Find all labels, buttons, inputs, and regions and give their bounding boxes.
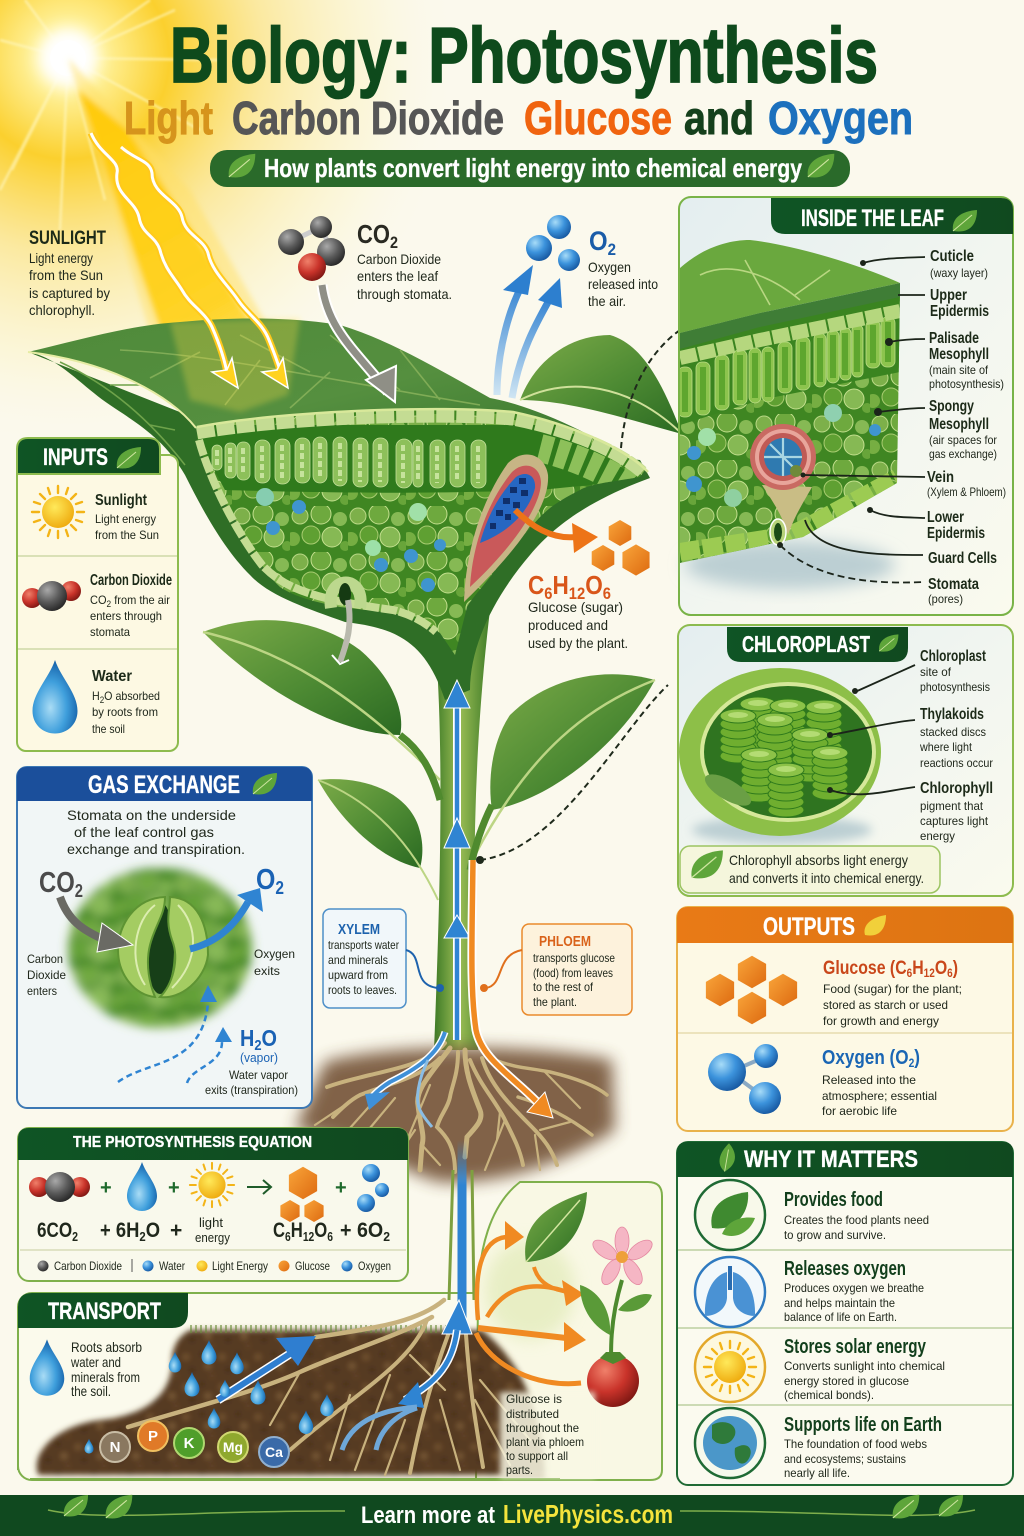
leaf labels: (air spaces for: [929, 433, 997, 447]
chloroplast callout: [680, 846, 940, 893]
outputs header: OUTPUTS: [763, 913, 855, 941]
co2 label: Carbon Dioxide: [357, 251, 441, 267]
subtitle: Oxygen: [768, 92, 913, 144]
chloroplast labels: energy: [920, 829, 955, 843]
output: oxygen: [708, 1044, 937, 1118]
gas exchange co2: [27, 867, 133, 998]
input: carbon dioxide: [22, 572, 172, 639]
equation icons: +: [100, 1177, 112, 1199]
glucose distribution text: [506, 1392, 584, 1477]
equation formula: 2: [383, 1229, 390, 1244]
gas exchange description: exchange and transpiration.: [67, 841, 245, 857]
xylem label: upward from: [328, 968, 388, 982]
sunlight label: chlorophyll.: [29, 302, 95, 318]
sunlight label: is captured by: [29, 285, 110, 301]
chloroplast labels: where light: [919, 740, 973, 754]
banner: How plants convert light energy into chemical energy: [264, 153, 802, 183]
output: glucose: Food (sugar) for the plant;: [823, 982, 962, 996]
leaf labels: Vein: [927, 469, 954, 486]
glucose callout: 12: [569, 584, 585, 603]
transport text: minerals from: [71, 1369, 140, 1385]
inside header: [771, 198, 1013, 234]
o2 label: Oxygen: [588, 259, 631, 275]
gas exchange description: [67, 807, 245, 857]
panel: chloroplast: [678, 625, 1013, 896]
transport header: [18, 1293, 188, 1328]
co2 label: enters the leaf: [357, 268, 438, 284]
input: carbon dioxide: enters through: [90, 609, 162, 623]
leaf vein section: [464, 454, 548, 602]
leaf veins: [120, 335, 480, 408]
stoma illustration: [68, 868, 252, 1028]
co2 label: [357, 219, 452, 302]
gas exchange header: GAS EXCHANGE: [88, 771, 240, 799]
glucose distribution text: Glucose is: [506, 1392, 562, 1406]
gas exchange header: [17, 767, 312, 801]
gas exchange water vapor: H: [240, 1025, 257, 1051]
lower roots: [128, 1300, 530, 1475]
footer sprig right: [680, 1495, 975, 1518]
output: glucose: stored as starch or used: [823, 998, 948, 1012]
output: oxygen: Oxygen (O: [822, 1047, 923, 1069]
equation icons: [29, 1162, 389, 1222]
xylem label: and minerals: [328, 953, 388, 967]
phloem label: (food) from leaves: [533, 966, 613, 980]
transport header: TRANSPORT: [48, 1298, 161, 1325]
glucose callout: O: [585, 570, 603, 600]
equation legend: [20, 1250, 406, 1273]
sunlight label: [29, 228, 110, 318]
equation formula: O: [314, 1219, 327, 1242]
gray arrow through stoma: [332, 600, 350, 664]
input: carbon dioxide: Carbon Dioxide: [90, 572, 172, 589]
o2 label: [588, 226, 658, 309]
o2 label: released into: [588, 276, 658, 292]
o2 arrows: [497, 265, 562, 398]
chloroplast callout: Chlorophyll absorbs light energy: [729, 852, 908, 868]
output: glucose: ): [953, 958, 958, 979]
input: water: Water: [92, 668, 132, 685]
minerals: N: [110, 1439, 120, 1456]
gas exchange o2: Oxygen: [254, 947, 295, 961]
why: releases oxygen: [695, 1257, 924, 1327]
equation formula: 6: [285, 1229, 291, 1244]
inputs header: INPUTS: [43, 444, 108, 471]
panel edge restored: [18, 1430, 560, 1479]
equation formula: 2: [139, 1229, 146, 1244]
why: stores solar energy: [695, 1332, 945, 1402]
why: releases oxygen: Produces oxygen we breathe: [784, 1281, 924, 1295]
output: oxygen: Released into the: [822, 1073, 916, 1087]
equation header: THE PHOTOSYNTHESIS EQUATION: [73, 1134, 312, 1151]
gas exchange o2: 2: [275, 878, 284, 898]
leaf labels: photosynthesis): [929, 377, 1004, 391]
glucose distribution backing: [500, 1392, 595, 1478]
gas exchange water vapor: Water vapor: [229, 1068, 288, 1082]
minerals: P: [148, 1428, 158, 1445]
target flower: [580, 1227, 655, 1385]
equation formula: H: [291, 1219, 303, 1242]
minerals: K: [184, 1435, 195, 1452]
stoma in section: [331, 582, 361, 608]
minerals: Ca: [265, 1444, 283, 1460]
output: glucose: 12: [924, 966, 935, 980]
xylem label: roots to leaves.: [328, 983, 397, 997]
glucose distribution text: parts.: [506, 1463, 533, 1477]
o2 label: 2: [608, 240, 616, 259]
soil: [37, 1329, 545, 1475]
leaf labels: Mesophyll: [929, 346, 989, 363]
why: supports life: and ecosystems; sustains: [784, 1452, 906, 1466]
output: glucose: 6: [907, 966, 912, 980]
equation formula: energy: [195, 1230, 230, 1245]
output: oxygen: for aerobic life: [822, 1104, 897, 1118]
gas exchange co2: 2: [75, 881, 83, 901]
why header: [677, 1142, 1013, 1177]
input: carbon dioxide: stomata: [90, 625, 130, 639]
equation formula: + 6H: [100, 1219, 145, 1242]
equation formula: O: [146, 1219, 160, 1242]
footer text: LivePhysics.com: [503, 1499, 673, 1529]
water droplets: [84, 1340, 334, 1454]
gas exchange o2: [190, 864, 295, 978]
soft tint: [485, 1240, 575, 1340]
sun glow: [0, 0, 460, 460]
gas exchange o2: exits: [254, 964, 280, 978]
subtitle: Glucose: [524, 92, 672, 144]
co2 label: through stomata.: [357, 286, 452, 302]
trunk flow: [342, 1140, 472, 1450]
chloroplast labels: Thylakoids: [920, 706, 984, 723]
chloroplast header: CHLOROPLAST: [742, 631, 870, 657]
glucose callout: 6: [544, 584, 553, 603]
sun beam: [68, 58, 310, 400]
chloroplast labels: Chloroplast: [920, 648, 986, 665]
leaf labels: Mesophyll: [929, 416, 989, 433]
panel: inputs: [17, 438, 178, 751]
why: provides food: to grow and survive.: [784, 1228, 886, 1242]
leaf labels: Cuticle: [930, 248, 974, 265]
panel: outputs: [677, 907, 1013, 1131]
gas exchange co2: CO: [39, 867, 82, 899]
subtitle: Carbon Dioxide: [232, 92, 504, 144]
input: water: the soil: [92, 722, 125, 736]
banner: [210, 150, 850, 187]
chloroplast labels: pigment that: [920, 799, 984, 813]
glucose distribution text: distributed: [506, 1407, 559, 1421]
sunlight label: Light energy: [29, 250, 93, 266]
co2 label: 2: [390, 233, 398, 252]
equation formula: + 6O: [340, 1219, 386, 1242]
equation header: [18, 1128, 408, 1160]
leaf block vein: [750, 424, 816, 545]
glucose callout: [515, 510, 650, 651]
plant stem: [434, 610, 490, 1050]
leaf labels: [777, 248, 1006, 606]
leaf labels: Epidermis: [930, 303, 989, 320]
leaf: upper right: [520, 335, 682, 434]
gas exchange description: of the leaf control gas: [74, 824, 214, 840]
why: provides food: [695, 1180, 929, 1250]
panel: inside the leaf: [678, 197, 1013, 615]
gas exchange co2: enters: [27, 984, 57, 998]
leaf top surface: [28, 318, 648, 472]
equation legend: Oxygen: [358, 1259, 391, 1273]
output: glucose: O: [935, 958, 947, 979]
glucose callout: 6: [603, 584, 611, 603]
chloroplast callout: and converts it into chemical energy.: [729, 870, 924, 886]
input: carbon dioxide: CO: [90, 593, 108, 607]
leaf: right: [470, 674, 655, 870]
equation formula: 6: [327, 1229, 333, 1244]
equation formula: light: [199, 1215, 223, 1230]
equation formula: [37, 1215, 390, 1245]
input: sunlight: Light energy: [95, 512, 156, 526]
leaf labels: Epidermis: [927, 525, 985, 542]
sunlight arrows: [91, 133, 288, 388]
leaf labels: Guard Cells: [928, 550, 997, 567]
phloem flow arrows: [472, 860, 553, 1118]
input: water: H: [92, 689, 101, 703]
chloroplast labels: photosynthesis: [920, 680, 990, 694]
glucose callout: Glucose (sugar): [528, 599, 623, 615]
gas exchange water vapor: 2: [254, 1037, 262, 1054]
leaf cross section: [197, 410, 644, 655]
input: water: by roots from: [92, 705, 158, 719]
co2 label: CO: [357, 219, 396, 249]
phloem label: to the rest of: [533, 980, 594, 994]
leaf epidermis: [197, 416, 642, 472]
gas exchange water vapor: (vapor): [240, 1050, 278, 1065]
output: oxygen: 2: [909, 1056, 915, 1070]
xylem label: transports water: [328, 938, 399, 952]
chloroplast labels: captures light: [920, 814, 989, 828]
why: stores solar energy: Converts sunlight into chemical: [784, 1359, 945, 1373]
chloroplast header: [727, 627, 908, 662]
equation formula: 2: [72, 1229, 78, 1244]
why: stores solar energy: energy stored in glucose: [784, 1374, 909, 1388]
leaf labels: Upper: [930, 287, 967, 304]
equation formula: C: [273, 1219, 288, 1242]
why: supports life: Supports life on Earth: [784, 1414, 942, 1436]
output: glucose: 6: [947, 966, 953, 980]
input: carbon dioxide: from the air: [111, 593, 170, 607]
why: releases oxygen: balance of life on Earth.: [784, 1310, 897, 1324]
input: water: O absorbed: [104, 689, 160, 703]
phloem label: [480, 924, 632, 1015]
phloem label: transports glucose: [533, 951, 615, 965]
equation legend: Water: [159, 1259, 185, 1273]
inputs header: [17, 438, 160, 474]
sunlight label: SUNLIGHT: [29, 228, 106, 249]
transport text: [30, 1339, 142, 1399]
output: glucose: Glucose (C: [823, 958, 923, 979]
outputs header: [677, 907, 1013, 943]
leaf labels: (pores): [928, 592, 963, 606]
equation formula: 12: [303, 1229, 314, 1244]
minerals: [100, 1421, 289, 1467]
output: glucose: [706, 956, 962, 1028]
panel: gas exchange: [17, 767, 312, 1108]
trunk stem lines: [449, 1170, 474, 1300]
leaf labels: Stomata: [928, 576, 979, 593]
leaf labels: (waxy layer): [930, 266, 988, 280]
equation icons: +: [335, 1177, 347, 1199]
output: glucose: for growth and energy: [823, 1014, 939, 1028]
why: provides food: Provides food: [784, 1189, 883, 1211]
leaf labels: Lower: [927, 509, 964, 526]
soil mound: [295, 1048, 615, 1182]
distribution sub-panel: [476, 1182, 662, 1480]
xylem label: XYLEM: [338, 921, 380, 938]
panel: transport: [18, 1140, 662, 1480]
glucose callout: produced and: [528, 617, 608, 633]
input: sunlight: from the Sun: [95, 528, 159, 542]
xylem flow arrows: [365, 680, 470, 1127]
input: water: [32, 660, 160, 736]
output: glucose: H: [912, 958, 924, 979]
leaf labels: Spongy: [929, 398, 974, 415]
chloroplast labels: site of: [920, 665, 952, 679]
inside header: INSIDE THE LEAF: [801, 205, 944, 232]
gas exchange description: Stomata on the underside: [67, 807, 236, 823]
why: releases oxygen: Releases oxygen: [784, 1258, 906, 1280]
leaf labels: (Xylem & Phloem): [927, 485, 1006, 499]
glucose distribution text: throughout the: [506, 1421, 579, 1435]
o2 label: O: [589, 226, 610, 256]
sunlight label: from the Sun: [29, 267, 103, 283]
output: oxygen: atmosphere; essential: [822, 1089, 937, 1103]
target leaf: [525, 1192, 587, 1262]
subtitle: [124, 92, 913, 144]
equation legend: Carbon Dioxide: [54, 1259, 122, 1273]
o2 label: the air.: [588, 293, 626, 309]
footer sprig left: [48, 1495, 345, 1518]
panel: equation: [18, 1128, 408, 1281]
subtitle: and: [684, 92, 754, 144]
input: water: 2: [100, 695, 104, 705]
glucose callout: used by the plant.: [528, 635, 628, 651]
why: provides food: Creates the food plants need: [784, 1213, 929, 1227]
input: sunlight: Sunlight: [95, 492, 148, 509]
phloem label: the plant.: [533, 995, 577, 1009]
leaf: lower left: [203, 620, 440, 800]
leaf underside: [28, 352, 650, 700]
gas exchange o2: O: [256, 864, 279, 896]
why: stores solar energy: Stores solar energy: [784, 1336, 927, 1358]
leaf labels: Palisade: [929, 330, 979, 347]
footer text: Learn more at: [361, 1502, 495, 1529]
transport text: the soil.: [71, 1383, 111, 1399]
co2 arrow: [322, 285, 396, 402]
upper roots: [315, 1043, 607, 1172]
why: supports life: The foundation of food webs: [784, 1437, 927, 1451]
equation legend: Light Energy: [212, 1259, 268, 1273]
main leaf: [28, 318, 660, 700]
gas exchange co2: Dioxide: [27, 968, 66, 982]
output: oxygen: ): [914, 1047, 920, 1069]
beam glow on leaf: [170, 318, 300, 412]
why: releases oxygen: and helps maintain the: [784, 1296, 895, 1310]
glucose distribution text: plant via phloem: [506, 1435, 584, 1449]
chloroplast labels: [827, 648, 993, 843]
o2 molecules: [526, 215, 580, 271]
chloroplast labels: Chlorophyll: [920, 780, 993, 797]
why header: WHY IT MATTERS: [744, 1146, 918, 1173]
glucose distribution text: to support all: [506, 1449, 568, 1463]
equation icons: +: [168, 1177, 180, 1199]
phloem distribution arrows: [476, 1221, 586, 1384]
why: stores solar energy: (chemical bonds).: [784, 1388, 874, 1402]
target fruit: [587, 1352, 639, 1407]
leaf: small left: [318, 779, 438, 900]
panel: why it matters: [677, 1142, 1013, 1485]
water uptake arrow: [218, 1336, 316, 1400]
transport text: Roots absorb: [71, 1339, 142, 1355]
subtitle: Light: [124, 92, 213, 144]
chloroplast labels: reactions occur: [920, 756, 993, 770]
input: sunlight: [32, 486, 159, 542]
co2 molecule: [278, 216, 345, 281]
minerals: Mg: [223, 1439, 243, 1455]
xylem label: [323, 909, 444, 1008]
leaf labels: gas exchange): [929, 447, 997, 461]
leaf block: [678, 240, 902, 567]
leaf block shadow: [685, 541, 895, 589]
footer: [0, 1495, 1024, 1536]
gas exchange co2: Carbon: [27, 952, 63, 966]
equation formula: +: [170, 1219, 182, 1242]
phloem label: PHLOEM: [539, 933, 591, 950]
equation legend: Glucose: [295, 1259, 330, 1273]
chloroplast labels: stacked discs: [920, 725, 986, 739]
gas exchange water vapor: exits (transpiration): [205, 1083, 298, 1097]
equation formula: 6CO: [37, 1219, 80, 1242]
gas exchange water vapor: O: [262, 1025, 277, 1051]
chloroplast illustration: [679, 668, 881, 844]
why: supports life: nearly all life.: [784, 1466, 850, 1480]
transport text: water and: [70, 1354, 121, 1370]
glucose callout: C: [528, 570, 547, 600]
dashed connectors: [480, 330, 680, 860]
glucose callout: H: [553, 570, 569, 600]
gas exchange water vapor: [118, 985, 298, 1097]
input: carbon dioxide: 2: [107, 599, 111, 609]
footer text: [361, 1499, 673, 1529]
why: supports life: [695, 1408, 942, 1480]
leaf labels: (main site of: [929, 363, 989, 377]
